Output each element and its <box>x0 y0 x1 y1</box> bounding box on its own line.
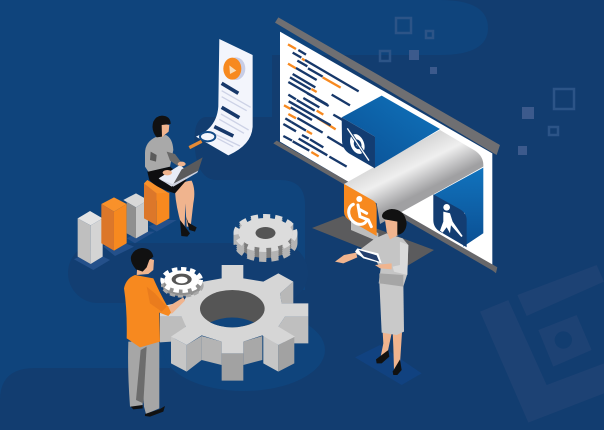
blue cube: blind person <box>433 168 483 247</box>
blouse <box>355 233 408 287</box>
gear hole <box>200 290 265 327</box>
orange wheelchair block <box>344 184 377 236</box>
legs <box>175 181 194 227</box>
shoes <box>145 406 165 417</box>
gear hole <box>256 227 276 239</box>
laptop <box>159 165 186 187</box>
white roll-up panel <box>344 130 483 224</box>
orange jacket <box>124 275 173 347</box>
head <box>137 257 154 275</box>
face <box>385 220 398 239</box>
head and hair <box>157 123 169 137</box>
pedestal under wheelchair block <box>351 217 378 242</box>
bar 3 <box>123 193 148 238</box>
bar 1 <box>78 211 103 264</box>
icon: person with cane <box>440 204 463 237</box>
decorative squares <box>380 18 574 135</box>
watermark logo: bottom right <box>480 265 604 423</box>
hands <box>163 170 172 175</box>
code lines on screen <box>283 44 359 167</box>
gear top face <box>160 265 308 353</box>
icon: crossed-out eye <box>347 128 369 161</box>
blouse <box>145 135 173 172</box>
trousers <box>128 342 159 414</box>
legs <box>380 332 392 360</box>
bar chart <box>74 180 177 270</box>
background blobs <box>0 0 488 400</box>
bar 4 seat <box>144 180 169 225</box>
shoes <box>376 350 389 363</box>
skirt <box>147 167 187 193</box>
skirt <box>379 282 404 335</box>
platform under presenter <box>312 216 434 266</box>
icon: magnifier <box>189 132 215 148</box>
gear side faces <box>160 317 186 342</box>
document with play button <box>189 39 253 155</box>
icon: play button <box>223 57 245 80</box>
document text lines <box>214 83 239 136</box>
heels <box>180 220 190 237</box>
screen surface <box>280 32 492 267</box>
icon: wheelchair <box>349 196 371 227</box>
tablet <box>355 248 382 263</box>
projection screen <box>273 17 500 273</box>
arm hand <box>168 297 185 314</box>
man with gear <box>124 248 202 417</box>
gear: large <box>160 265 308 381</box>
floor shadow <box>355 345 422 385</box>
hand left <box>335 253 357 263</box>
blue cube: visual impairment <box>342 96 440 168</box>
held gear <box>162 269 202 296</box>
woman with laptop <box>145 116 203 237</box>
screen bottom rail <box>273 141 497 273</box>
standing woman with tablet <box>335 209 422 385</box>
bar 2 <box>101 197 127 251</box>
bar shadows <box>74 220 177 270</box>
gear: upper <box>236 216 295 260</box>
hand right <box>375 263 392 269</box>
hair <box>382 209 407 235</box>
screen top rod <box>275 17 500 155</box>
